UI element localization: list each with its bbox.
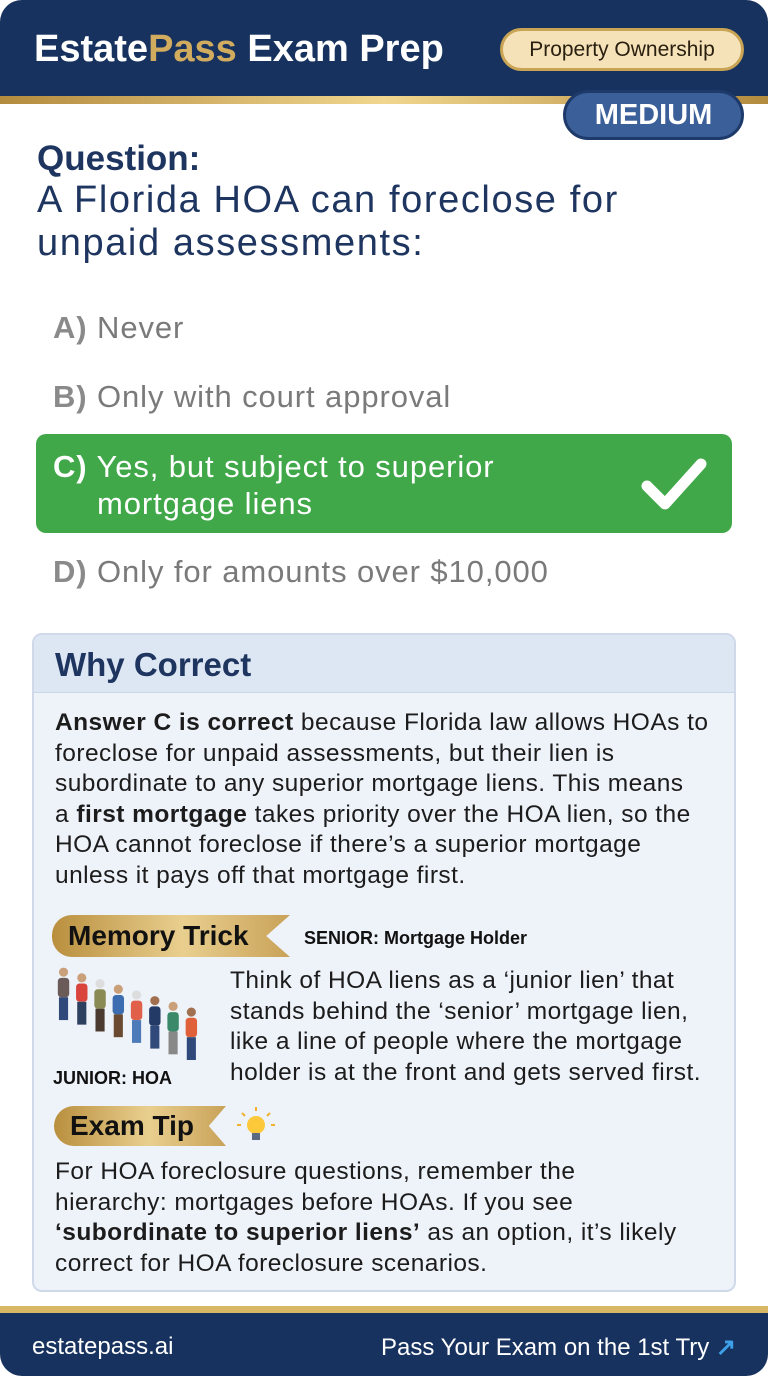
footer url: estatepass.ai [32, 1333, 173, 1360]
memory trick text: holder is at the front and gets served first. [230, 1059, 701, 1086]
panel heading [34, 635, 738, 693]
exam tip text: For HOA foreclosure questions, remember the [55, 1158, 575, 1185]
option D: D) Only for amounts over $10,000 [53, 554, 549, 589]
option B: B) Only with court approval [53, 379, 451, 414]
memory trick ribbon: Memory Trick [68, 920, 249, 951]
memory trick text [230, 967, 701, 1086]
header [0, 0, 768, 104]
category pill: Property Ownership [529, 38, 715, 61]
icon: line of people [58, 968, 198, 1060]
explanation text: foreclose for unpaid assessments, but their lien is [55, 740, 614, 767]
exam tip text: hierarchy: mortgages before HOAs. If you see [55, 1189, 573, 1216]
icon: checkmark [642, 458, 706, 510]
panel heading: Why Correct [55, 646, 251, 683]
memory trick text: Think of HOA liens as a ‘junior lien’ that [230, 967, 674, 994]
question: unpaid assessments: [37, 222, 424, 264]
option C correct [36, 434, 732, 533]
exam tip text: ‘subordinate to superior liens’ as an option, it’s likely [55, 1219, 677, 1246]
question [37, 139, 619, 264]
memory trick text: like a line of people where the mortgage [230, 1028, 682, 1055]
memory trick text: stands behind the ‘senior’ mortgage lien, [230, 998, 688, 1025]
explanation text: a first mortgage takes priority over the HOA lien, so the [55, 801, 691, 828]
footer tagline: Pass Your Exam on the 1st Try ↗ [381, 1334, 736, 1361]
senior label: SENIOR: Mortgage Holder [304, 928, 527, 948]
exam tip text: correct for HOA foreclosure scenarios. [55, 1250, 487, 1277]
explanation text: subordinate to any superior mortgage liens. This means [55, 770, 684, 797]
question: Question: [37, 139, 200, 178]
explanation text: unless it pays off that mortgage first. [55, 862, 466, 889]
exam tip text [55, 1158, 677, 1277]
icon: lightbulb [237, 1107, 275, 1140]
option A: A) Never [53, 310, 184, 345]
question: A Florida HOA can foreclose for [37, 179, 619, 221]
junior label: JUNIOR: HOA [53, 1068, 172, 1088]
explanation text: Answer C is correct because Florida law allows HOAs to [55, 709, 708, 736]
panel: why correct [32, 633, 736, 1292]
difficulty badge: MEDIUM [595, 99, 712, 131]
option C correct: mortgage liens [97, 486, 313, 521]
exam tip ribbon: Exam Tip [70, 1110, 194, 1141]
explanation text [55, 709, 708, 889]
difficulty badge [563, 90, 744, 140]
explanation text: HOA cannot foreclose if there’s a superior mortgage [55, 831, 641, 858]
footer [0, 1306, 768, 1376]
exam tip ribbon [54, 1106, 226, 1146]
memory trick ribbon [52, 915, 290, 957]
category pill [500, 28, 744, 71]
title: EstatePass Exam Prep [34, 28, 444, 70]
option C correct: C) Yes, but subject to superior [53, 449, 494, 484]
